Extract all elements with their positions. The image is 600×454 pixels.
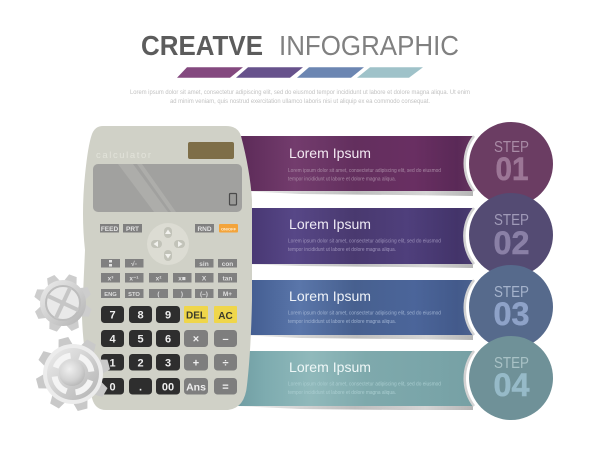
step 1 badge: 01: [496, 151, 528, 187]
small keys: √▫: [131, 260, 137, 268]
small keys: x²: [156, 276, 162, 282]
main keys: 7: [109, 310, 116, 322]
display: [93, 164, 242, 212]
direction pad: [147, 223, 189, 265]
main keys: 4: [109, 334, 116, 346]
function keys: FEED: [101, 226, 118, 233]
intro text: [130, 89, 470, 105]
panel: step 4 ribbon: [235, 351, 474, 410]
main keys: +: [193, 358, 199, 370]
small keys: x■: [178, 276, 186, 282]
panel: step 4 ribbon: Lorem Ipsum: [289, 359, 371, 375]
main keys: 6: [165, 334, 171, 346]
intro text: Lorem ipsum dolor sit amet, consectetur adipiscing elit, sed do eiusmod tempor incididunt ut labore et dolore magna aliqua. Ut enim: [130, 89, 470, 96]
step 2 badge: 02: [494, 225, 530, 261]
function keys: [100, 224, 238, 233]
panel: step 1 ribbon: Lorem ipsum dolor sit amet, consectetur adipiscing elit, sed do eiusmod: [288, 168, 441, 174]
function keys: ON/OFF: [221, 226, 237, 231]
icon: upper gear: [33, 273, 93, 333]
panel: step 2 ribbon: tempor incididunt ut labore et dolore magna aliqua.: [288, 247, 396, 253]
main keys: ÷: [222, 358, 229, 370]
panel: step 2 ribbon: Lorem Ipsum: [289, 216, 371, 232]
small keys: STO: [128, 292, 140, 298]
panel: step 2 ribbon: Lorem ipsum dolor sit amet, consectetur adipiscing elit, sed do eiusmod: [288, 238, 441, 244]
calculator body: [82, 126, 252, 410]
step 4 badge: [469, 336, 553, 420]
main keys: 5: [137, 334, 144, 346]
small keys: x⁻¹: [129, 276, 139, 282]
step 2 badge: [469, 193, 553, 277]
step 3 badge: 03: [494, 296, 530, 332]
small keys: con: [222, 261, 233, 268]
main keys: 8: [137, 310, 144, 322]
main keys: DEL: [186, 310, 206, 322]
main keys: .: [139, 382, 142, 394]
step 1 badge: STEP: [494, 139, 529, 156]
panel: step 3 ribbon: tempor incididunt ut labore et dolore magna aliqua.: [288, 319, 396, 325]
colour bars: [177, 67, 423, 78]
small keys: [101, 259, 237, 298]
step 1 badge: [469, 122, 553, 206]
main keys: 2: [137, 358, 144, 370]
panel: step 3 ribbon: Lorem ipsum dolor sit amet, consectetur adipiscing elit, sed do eiusmod: [288, 310, 441, 316]
panel: step 1 ribbon: tempor incididunt ut labore et dolore magna aliqua.: [288, 176, 396, 182]
main keys: [101, 306, 237, 394]
title: INFOGRAPHIC: [279, 30, 459, 61]
main keys: 3: [165, 358, 171, 370]
function keys: PRT: [126, 226, 139, 233]
step 4 badge: 04: [494, 367, 530, 403]
small keys: M+: [223, 291, 232, 298]
step 3 badge: STEP: [494, 284, 529, 301]
step 4 badge: STEP: [494, 355, 529, 372]
title: [141, 30, 459, 61]
small keys: ): [181, 291, 183, 298]
step 2 badge: STEP: [494, 212, 529, 229]
function keys: RND: [197, 226, 212, 233]
panel: step 2 ribbon: [235, 208, 474, 268]
main keys: ×: [193, 334, 199, 346]
main keys: –: [222, 334, 229, 346]
step 3 badge: [469, 265, 553, 349]
panel: step 3 ribbon: Lorem Ipsum: [289, 288, 371, 304]
main keys: 00: [162, 382, 174, 394]
small keys: (–): [200, 291, 208, 298]
main keys: 9: [165, 310, 171, 322]
main keys: 1: [109, 358, 116, 370]
panel: step 4 ribbon: tempor incididunt ut labore et dolore magna aliqua.: [288, 390, 396, 396]
calculator: [82, 126, 252, 410]
panel: step 1 ribbon: Lorem Ipsum: [289, 145, 371, 161]
calculator label: calculator: [96, 150, 153, 161]
main keys: =: [222, 382, 229, 394]
small keys: (: [157, 291, 160, 298]
icon: lower gear: [35, 336, 111, 412]
title: CREATVE: [141, 30, 263, 61]
small keys: tan: [223, 276, 232, 282]
panel: step 1 ribbon: [235, 136, 474, 196]
small keys: X: [202, 276, 207, 282]
panel: step 3 ribbon: [235, 280, 474, 340]
intro text: ad minim veniam, quis nostrud exercitation ullamco laboris nisi ut aliquip ex ea commodo consequat.: [170, 98, 430, 105]
solar panel: [188, 142, 234, 159]
main keys: AC: [218, 311, 233, 322]
small keys: ENG: [104, 292, 117, 298]
small keys: x³: [108, 276, 114, 282]
small keys: sin: [199, 261, 209, 268]
panel: step 4 ribbon: Lorem ipsum dolor sit amet, consectetur adipiscing elit, sed do eiusmod: [288, 382, 441, 388]
main keys: 0: [109, 382, 116, 394]
main keys: Ans: [186, 382, 206, 394]
